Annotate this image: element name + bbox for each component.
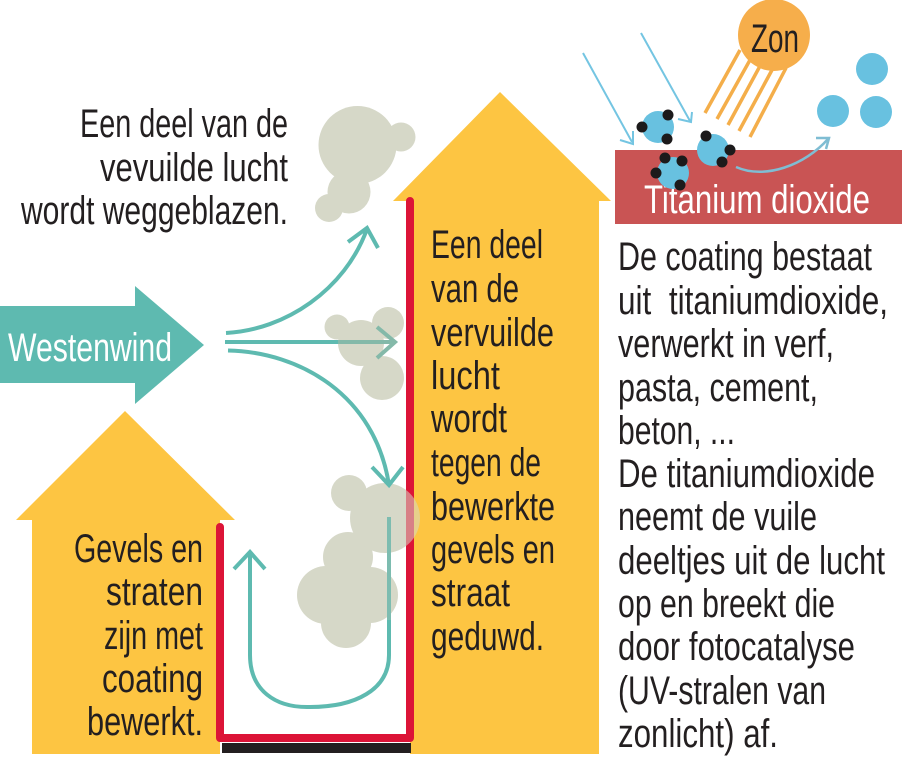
text: coating applied: coating	[102, 657, 203, 701]
text: pushed against surfaces: bewerkte	[431, 485, 555, 529]
street surface	[222, 743, 411, 753]
house: right building	[393, 92, 611, 754]
icon: sun: Zon	[751, 17, 799, 61]
text: blown away	[20, 102, 288, 233]
text: pushed against surfaces	[430, 223, 555, 659]
icon: sun	[738, 0, 810, 71]
text: pushed against surfaces: tegen de	[431, 441, 541, 485]
cloud: bottom	[297, 475, 420, 648]
text: pushed against surfaces: Een deel	[431, 223, 543, 267]
text: coating explanation: neemt de vuile	[618, 495, 817, 539]
text: pushed against surfaces: vervuilde	[431, 311, 554, 355]
text: pushed against surfaces: geduwd.	[431, 615, 544, 659]
text: coating explanation: (UV-stralen van	[618, 669, 826, 713]
cloud: middle	[324, 307, 404, 400]
coated walls and street	[220, 201, 410, 738]
text: coating applied	[74, 527, 203, 744]
text: coating applied: Gevels en	[74, 527, 203, 571]
arrow: Westenwind: Westenwind	[8, 326, 172, 370]
panel: titanium dioxide layer	[615, 150, 902, 224]
text: coating explanation: pasta, cement,	[618, 366, 818, 410]
text: pushed against surfaces: van de	[431, 267, 519, 311]
wind arrows	[225, 228, 403, 707]
arrow: Westenwind	[0, 286, 204, 404]
cloud: top	[315, 106, 416, 222]
UV arrows	[583, 33, 692, 144]
clean-air arrow	[736, 138, 829, 172]
icon: sun rays	[705, 50, 786, 137]
text: coating explanation: verwerkt in verf,	[618, 322, 834, 366]
text: blown away: vevuilde lucht	[100, 146, 288, 190]
clean particles	[817, 53, 892, 128]
particles with dirt	[636, 110, 736, 190]
text: coating applied: bewerkt.	[87, 700, 203, 744]
text: pushed against surfaces: wordt	[430, 397, 507, 441]
text: coating applied: straten	[106, 570, 203, 614]
wind arrow over clouds	[338, 327, 395, 620]
text: coating explanation: op en breekt die	[618, 582, 835, 626]
text: pushed against surfaces: straat	[431, 571, 510, 615]
text: blown away: wordt weggeblazen.	[20, 189, 288, 233]
text: coating explanation: zonlicht) af.	[618, 712, 778, 756]
text: pushed against surfaces: lucht	[431, 354, 500, 398]
house: left building	[16, 411, 235, 754]
text: coating explanation	[618, 235, 888, 756]
text: coating explanation: beton, ...	[618, 409, 735, 453]
text: blown away: Een deel van de	[80, 102, 288, 146]
text: coating applied: zijn met	[104, 614, 203, 658]
text: pushed against surfaces: gevels en	[431, 528, 555, 572]
